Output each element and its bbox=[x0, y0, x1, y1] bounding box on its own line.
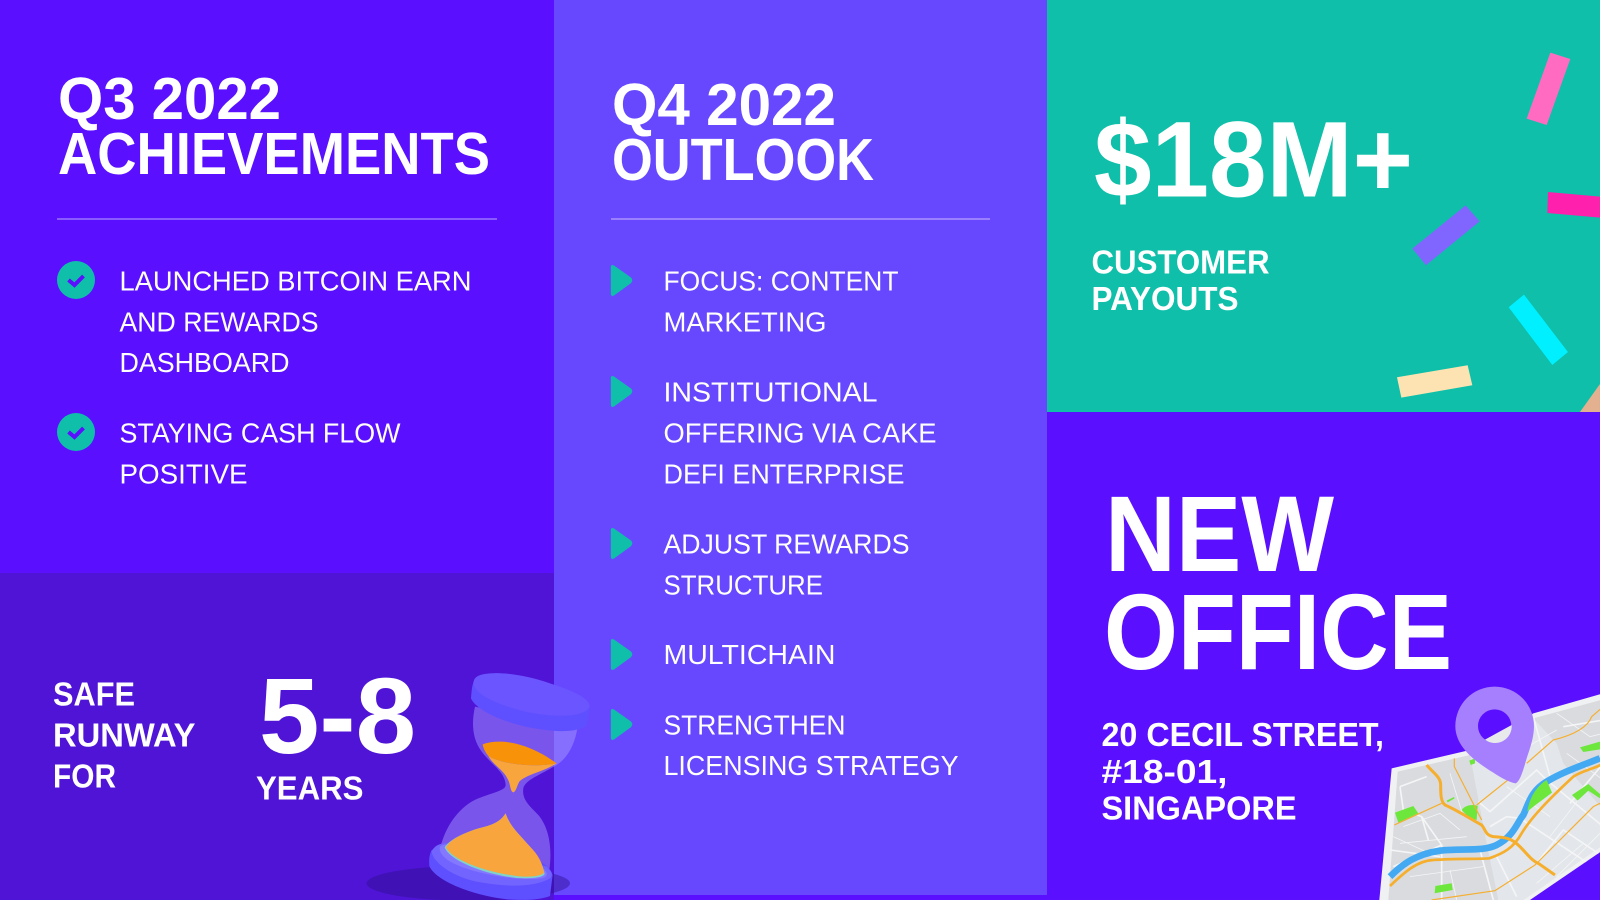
address: #18-01, bbox=[1102, 754, 1228, 791]
heading: Q3 2022 achievements bbox=[58, 66, 490, 187]
list item: cash flow bbox=[57, 413, 401, 489]
list item: institutional offering: OFFERING VIA CAKE bbox=[664, 417, 936, 448]
list item: rewards structure bbox=[611, 528, 910, 600]
stat: $18M+: $18M+ bbox=[1094, 98, 1413, 220]
heading: new office: OFFICE bbox=[1104, 571, 1452, 692]
heading: new office bbox=[1104, 473, 1452, 692]
icon: hourglass bbox=[367, 673, 590, 900]
label: safe runway for: RUNWAY bbox=[53, 718, 196, 754]
list item: licensing strategy: LICENSING STRATEGY bbox=[664, 750, 958, 781]
list item: rewards structure: ADJUST REWARDS bbox=[664, 528, 910, 559]
list item: institutional offering: INSTITUTIONAL bbox=[664, 376, 878, 407]
list item: bitcoin earn: LAUNCHED BITCOIN EARN bbox=[120, 265, 472, 296]
heading: Q4 2022 outlook: OUTLOOK bbox=[612, 127, 874, 193]
label: customer payouts bbox=[1092, 244, 1270, 318]
label: safe runway for: FOR bbox=[53, 758, 116, 796]
heading: new office: NEW bbox=[1105, 473, 1334, 594]
address: SINGAPORE bbox=[1102, 790, 1296, 828]
decoration: confetti bbox=[1397, 53, 1600, 412]
address bbox=[1102, 717, 1384, 828]
panel: Q3 achievements bbox=[57, 66, 497, 489]
label: customer payouts: PAYOUTS bbox=[1092, 281, 1238, 318]
list item: bitcoin earn: AND REWARDS bbox=[120, 306, 318, 337]
list item: institutional offering: DEFI ENTERPRISE bbox=[664, 458, 904, 489]
icon: map with location pin bbox=[1379, 687, 1600, 900]
list item: content marketing: FOCUS: CONTENT bbox=[664, 265, 899, 296]
list item: licensing strategy: STRENGTHEN bbox=[664, 709, 846, 740]
list item: bitcoin earn: DASHBOARD bbox=[120, 347, 290, 378]
heading: Q3 2022 achievements: Q3 2022 bbox=[58, 66, 281, 132]
list item: rewards structure: STRUCTURE bbox=[664, 569, 823, 600]
list item: institutional offering bbox=[611, 376, 936, 489]
address: 20 CECIL STREET, bbox=[1102, 717, 1384, 754]
panel: customer payouts bbox=[1047, 0, 1600, 412]
stat: 5-8 years: YEARS bbox=[256, 770, 364, 808]
list item: content marketing bbox=[611, 265, 899, 337]
list item: cash flow: POSITIVE bbox=[120, 458, 248, 489]
heading: Q4 2022 outlook: Q4 2022 bbox=[612, 72, 836, 138]
panel: Q4 outlook bbox=[554, 0, 1047, 895]
label: safe runway for bbox=[53, 676, 196, 796]
list item: content marketing: MARKETING bbox=[664, 306, 826, 337]
stat: 5-8 years: 5-8 bbox=[259, 655, 416, 776]
label: safe runway for: SAFE bbox=[53, 676, 135, 714]
label: customer payouts: CUSTOMER bbox=[1092, 244, 1270, 282]
list item: bitcoin earn bbox=[57, 261, 472, 378]
heading: Q4 2022 outlook bbox=[612, 72, 874, 193]
panel: safe runway bbox=[0, 573, 554, 900]
list item: cash flow: STAYING CASH FLOW bbox=[120, 417, 401, 448]
panel: new office bbox=[1102, 473, 1600, 900]
list item: multichain: MULTICHAIN bbox=[664, 639, 836, 670]
heading: Q3 2022 achievements: ACHIEVEMENTS bbox=[58, 121, 490, 187]
list item: licensing strategy bbox=[611, 709, 958, 781]
